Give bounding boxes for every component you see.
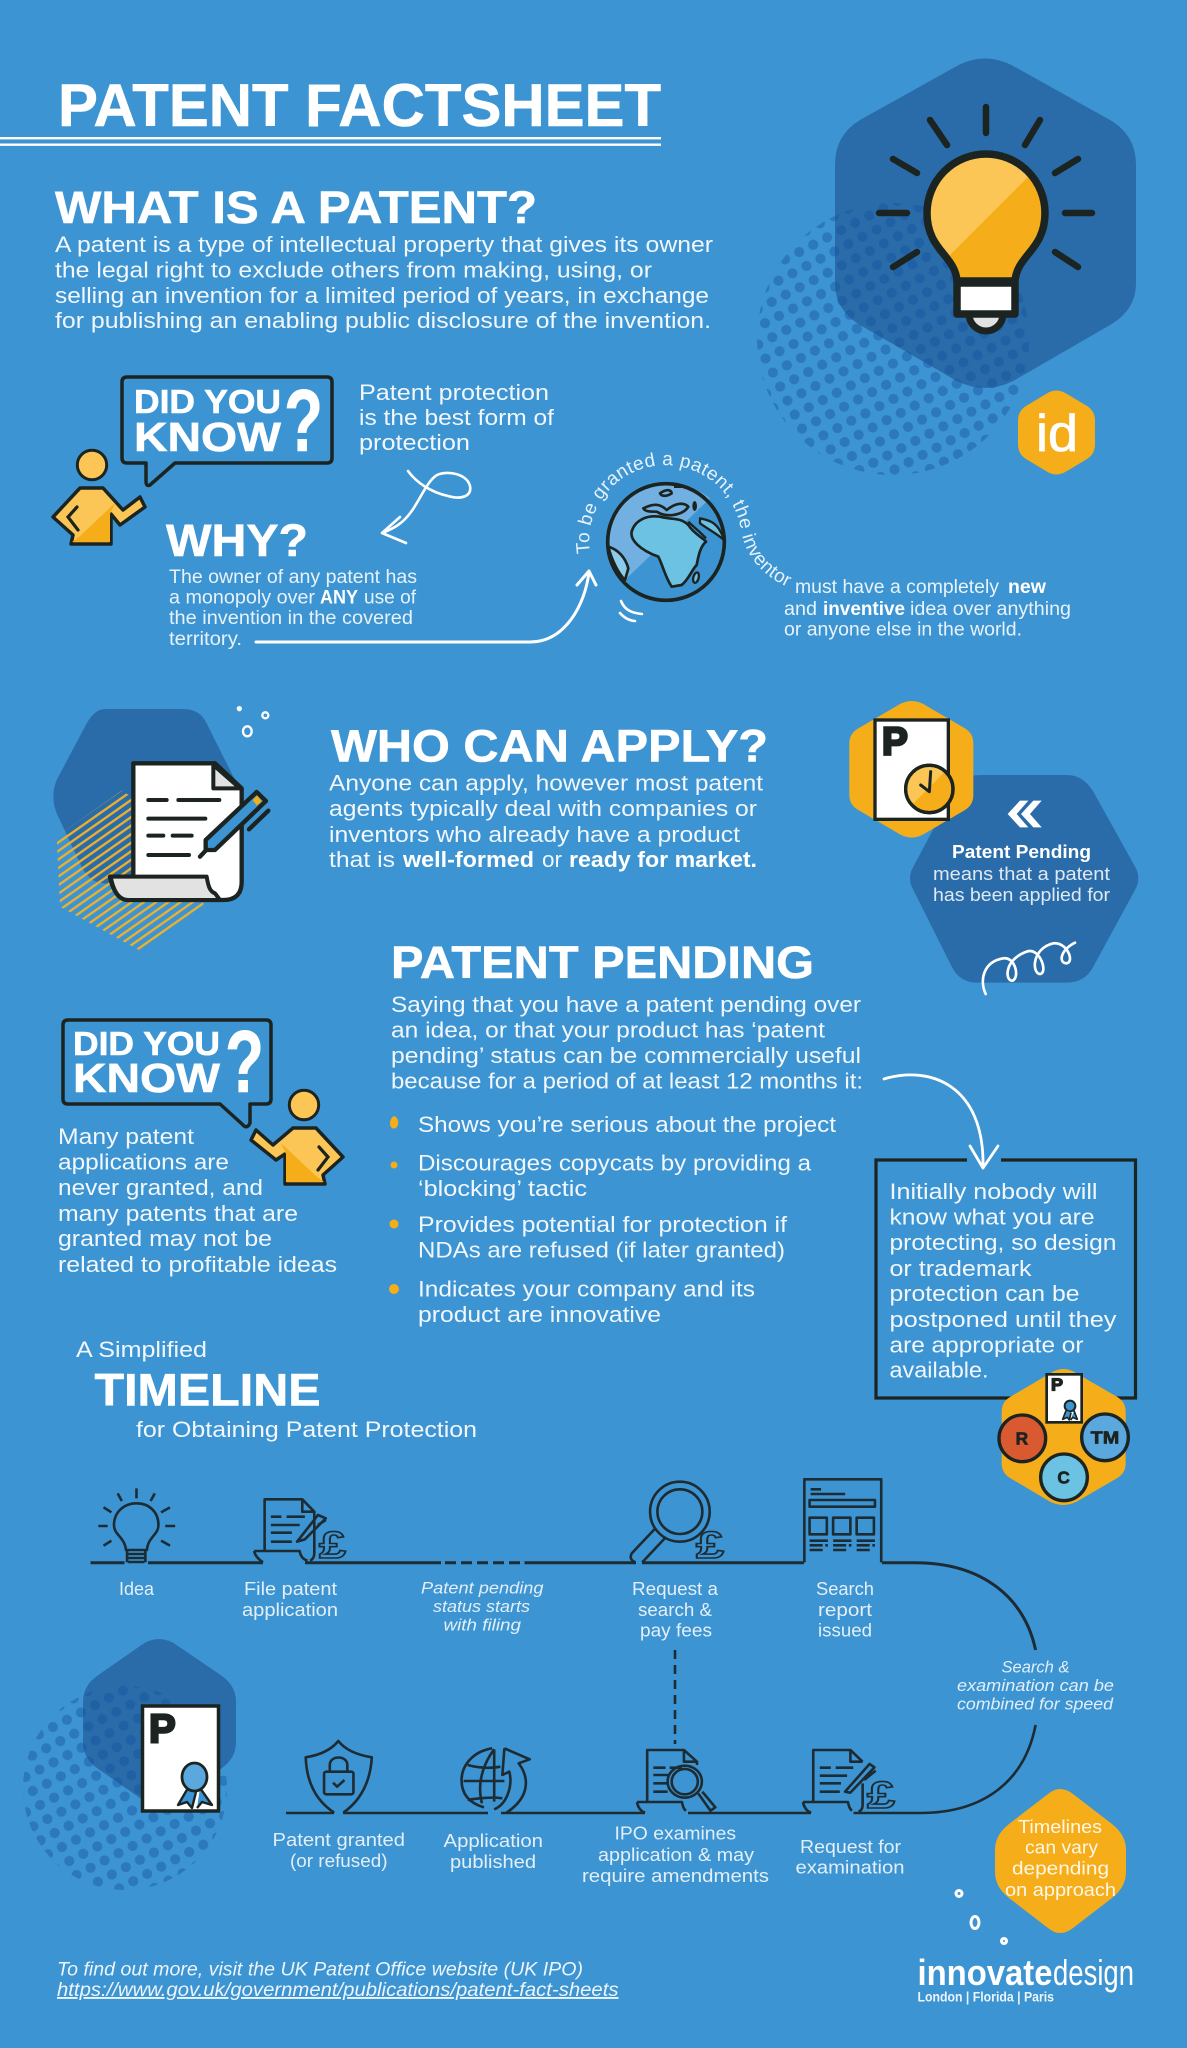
callout box: initially nobody: available. [890, 1358, 988, 1382]
callout box: initially nobody: Initially nobody will [890, 1179, 1098, 1204]
text block: why explanation: territory. [169, 629, 242, 650]
timeline: dashed connector [674, 1650, 676, 1744]
callout box: initially nobody: protecting, so design [890, 1230, 1116, 1255]
callout: timelines can vary: can vary [1025, 1838, 1098, 1858]
text block: patent pending intro: an idea, or that your product has ‘patent [391, 1018, 825, 1042]
panel: patent pending hexagon note: has been applied for [933, 884, 1110, 905]
timeline: lower line [286, 1725, 1036, 1813]
note: search and examination: combined for speed [957, 1696, 1114, 1714]
labels: lower timeline: Application [444, 1831, 543, 1851]
icon: outline magnifier [631, 1482, 724, 1567]
text block: patent pending intro [391, 992, 863, 1094]
note: search and examination: Search & [1002, 1658, 1070, 1676]
heading: why: WHY? [166, 515, 308, 566]
labels: lower timeline: IPO examines [614, 1824, 736, 1844]
text block: patent pending intro: Saying that you have a patent pending over [391, 992, 861, 1017]
decoration: small bubbles [956, 1890, 1006, 1944]
icon: outline globe arrow [462, 1748, 530, 1813]
callout: timelines can vary: depending [1012, 1858, 1109, 1878]
text block: new and inventive idea: must have a completely [795, 577, 1000, 598]
text block: who can apply: Anyone can apply, however most patent [329, 770, 763, 796]
heading: timeline: A Simplified [76, 1337, 207, 1362]
callout: timelines can vary: on approach [1005, 1880, 1116, 1900]
labels: upper timeline [119, 1579, 874, 1640]
icon: person 2 [251, 1090, 343, 1184]
text block: who can apply: inventors who already have a product [329, 822, 740, 847]
icon: light bulb on hexagon [757, 58, 1136, 475]
icon: IP rights hexagon: TM [1091, 1427, 1119, 1447]
note: patent pending status: status starts [433, 1598, 530, 1616]
labels: upper timeline: pay fees [640, 1620, 712, 1640]
text block: many patent applications: many patents that are [58, 1201, 298, 1226]
callout: timelines can vary: Timelines [1018, 1817, 1102, 1837]
icon: id badge: id [1036, 405, 1078, 463]
logo: innovate design: London | Florida | Paris [918, 1990, 1054, 2004]
panel: patent pending hexagon note: means that a patent [933, 863, 1110, 884]
labels: upper timeline: issued [818, 1620, 872, 1640]
title: PATENT FACTSHEET [58, 72, 661, 139]
callout: did you know 1 [122, 371, 332, 486]
icon: outline search report [804, 1479, 881, 1562]
text block: why explanation: the invention in the covered [169, 608, 413, 629]
text block: new and inventive idea: and [784, 599, 817, 620]
note: search and examination [957, 1658, 1114, 1714]
icon: patent document with medal on hexagon [23, 1639, 236, 1890]
text block: patent protection: protection [359, 430, 470, 455]
heading: timeline: for Obtaining Patent Protection [136, 1417, 477, 1442]
note: patent pending status: with filing [444, 1616, 522, 1634]
labels: upper timeline: File patent [244, 1579, 337, 1599]
text block: new and inventive idea: inventive [823, 599, 905, 620]
labels: lower timeline: require amendments [582, 1866, 769, 1886]
note: patent pending status: Patent pending [421, 1580, 544, 1598]
text block: why explanation: a monopoly over [169, 588, 316, 608]
icon: outline bulb [98, 1488, 175, 1562]
heading: who can apply: WHO CAN APPLY? [331, 720, 768, 772]
callout: did you know 2: DID YOU [73, 1025, 220, 1062]
text block: patent protection: is the best form of [359, 405, 555, 430]
text block: patent protection [359, 380, 555, 455]
icon: outline file application: £ [319, 1525, 346, 1567]
icon: outline document magnifier [637, 1750, 715, 1813]
text block: new and inventive idea: idea over anything [910, 599, 1071, 620]
callout: did you know 1: DID YOU [134, 383, 281, 420]
labels: lower timeline: Patent granted [272, 1830, 405, 1850]
text: curved caption around globe: To be granted a patent, the inventor [576, 452, 792, 586]
text block: many patent applications [58, 1124, 337, 1277]
text block: many patent applications: Many patent [58, 1124, 194, 1149]
text block: who can apply: ready for market. [569, 847, 757, 872]
footer: source link [57, 1960, 619, 2001]
logo: innovate design [918, 1952, 1134, 2004]
heading: what is a patent: WHAT IS A PATENT? [55, 182, 537, 233]
callout: did you know 2: KNOW [73, 1055, 220, 1101]
heading: timeline [76, 1337, 477, 1442]
text block: many patent applications: never granted, and [58, 1175, 263, 1200]
labels: upper timeline: Idea [119, 1579, 155, 1599]
icon: IP rights hexagon: P [1051, 1375, 1063, 1395]
labels: lower timeline: (or refused) [290, 1851, 388, 1871]
icon: outline magnifier: £ [696, 1525, 724, 1567]
panel: patent pending hexagon note: Patent Pending [952, 841, 1091, 862]
callout box: initially nobody: know what you are [890, 1204, 1094, 1230]
bullet 2: ‘blocking’ tactic [418, 1176, 587, 1201]
text block: patent definition: the legal right to exclude others from making, using, or [55, 258, 652, 282]
icon: patent document with clock: P [882, 720, 908, 763]
arrow: why to globe [256, 571, 596, 642]
labels: lower timeline: published [450, 1852, 536, 1872]
footer: source link: To find out more, visit the UK Patent Office website (UK IPO) [57, 1960, 583, 1980]
labels: lower timeline [272, 1824, 904, 1886]
text block: many patent applications: applications are [58, 1150, 229, 1174]
bullet 4: product are innovative [418, 1302, 661, 1327]
labels: upper timeline: Search [816, 1579, 874, 1599]
icon: patent document with medal on hexagon: P [149, 1707, 176, 1751]
icon: outline file application [254, 1499, 346, 1567]
bullet 4: Indicates your company and its [418, 1276, 755, 1302]
text block: many patent applications: related to profitable ideas [58, 1252, 337, 1277]
labels: lower timeline: Request for [800, 1837, 901, 1857]
bullet 2 [390, 1150, 812, 1201]
text block: patent pending intro: pending’ status can be commercially useful [391, 1043, 861, 1068]
text block: why explanation: use of [364, 588, 417, 608]
heading: timeline: TIMELINE [94, 1364, 320, 1416]
callout: did you know 1: ? [284, 371, 323, 470]
text block: patent definition: for publishing an enabling public disclosure of the invention. [55, 308, 711, 333]
timeline: upper line [90, 1563, 1036, 1650]
logo: innovate design: innovate [918, 1952, 1052, 1993]
arrow: to initially nobody box [884, 1075, 998, 1168]
text block: who can apply: or [542, 847, 562, 872]
text block: new and inventive idea [784, 577, 1071, 640]
callout box: initially nobody: or trademark [890, 1256, 1033, 1281]
labels: lower timeline: examination [796, 1858, 904, 1878]
callout box: initially nobody [876, 1160, 1136, 1398]
note: patent pending status [421, 1580, 544, 1634]
callout: did you know 1: KNOW [134, 414, 281, 460]
icon: outline shield [306, 1741, 372, 1813]
bullet 4 [389, 1276, 755, 1327]
logo: innovate design: design [1053, 1952, 1134, 1993]
labels: upper timeline: Request a [632, 1579, 719, 1599]
callout box: initially nobody: protection can be [890, 1281, 1080, 1306]
icon: id badge [1018, 390, 1095, 474]
arrow: curly arrow to why [382, 471, 470, 543]
icon: outline request examination: £ [867, 1775, 895, 1817]
callout: did you know 2 [63, 1012, 271, 1127]
text block: patent protection: Patent protection [359, 380, 549, 405]
text block: patent definition: A patent is a type of intellectual property that gives its owner [55, 232, 713, 257]
text block: who can apply [329, 770, 763, 872]
text block: new and inventive idea: new [1008, 577, 1046, 598]
text block: patent definition: selling an invention for a limited period of years, in exchange [55, 283, 709, 308]
bullet 3: Provides potential for protection if [418, 1212, 788, 1237]
bullet 3: NDAs are refused (if later granted) [418, 1238, 785, 1262]
list: patent pending benefits [389, 1112, 836, 1327]
icon: IP rights hexagon: C [1057, 1467, 1070, 1487]
icon: outline request examination [803, 1750, 895, 1817]
text block: patent definition [55, 232, 713, 333]
callout: did you know 2: ? [225, 1012, 264, 1111]
bullet 1: Shows you’re serious about the project [418, 1112, 836, 1137]
text block: why explanation: ANY [320, 588, 358, 608]
text block: who can apply: well-formed [402, 847, 534, 872]
note: search and examination: examination can be [957, 1677, 1114, 1695]
icon: globe [608, 484, 724, 621]
text block: who can apply: agents typically deal with companies or [329, 796, 757, 821]
labels: lower timeline: application & may [598, 1845, 754, 1865]
callout box: initially nobody: are appropriate or [890, 1332, 1084, 1358]
icon: patent document with clock [849, 701, 973, 837]
icon: IP rights hexagon: R [1016, 1428, 1029, 1448]
callout box: initially nobody: postponed until they [890, 1307, 1116, 1332]
icon: document and pen on hexagons [53, 706, 268, 951]
text block: patent pending intro: because for a period of at least 12 months it: [391, 1068, 863, 1094]
callout: timelines can vary [995, 1789, 1126, 1933]
text block: why explanation [169, 567, 417, 650]
labels: upper timeline: report [818, 1600, 872, 1620]
icon: person 1 [53, 450, 145, 544]
footer: source link: https://www.gov.uk/government/publications/patent-fact-sheets [57, 1980, 619, 2001]
panel: patent pending hexagon note [910, 775, 1138, 994]
text block: who can apply: that is [329, 847, 395, 872]
text block: new and inventive idea: or anyone else in the world. [784, 620, 1022, 640]
bullet 2: Discourages copycats by providing a [418, 1150, 812, 1176]
heading: patent pending: PATENT PENDING [391, 937, 814, 988]
text block: why explanation: The owner of any patent has [169, 567, 417, 588]
labels: upper timeline: application [242, 1600, 338, 1620]
bullet 3 [390, 1212, 788, 1262]
icon: IP rights hexagon [999, 1369, 1128, 1505]
text block: many patent applications: granted may not be [58, 1226, 272, 1251]
labels: upper timeline: search & [638, 1600, 712, 1620]
